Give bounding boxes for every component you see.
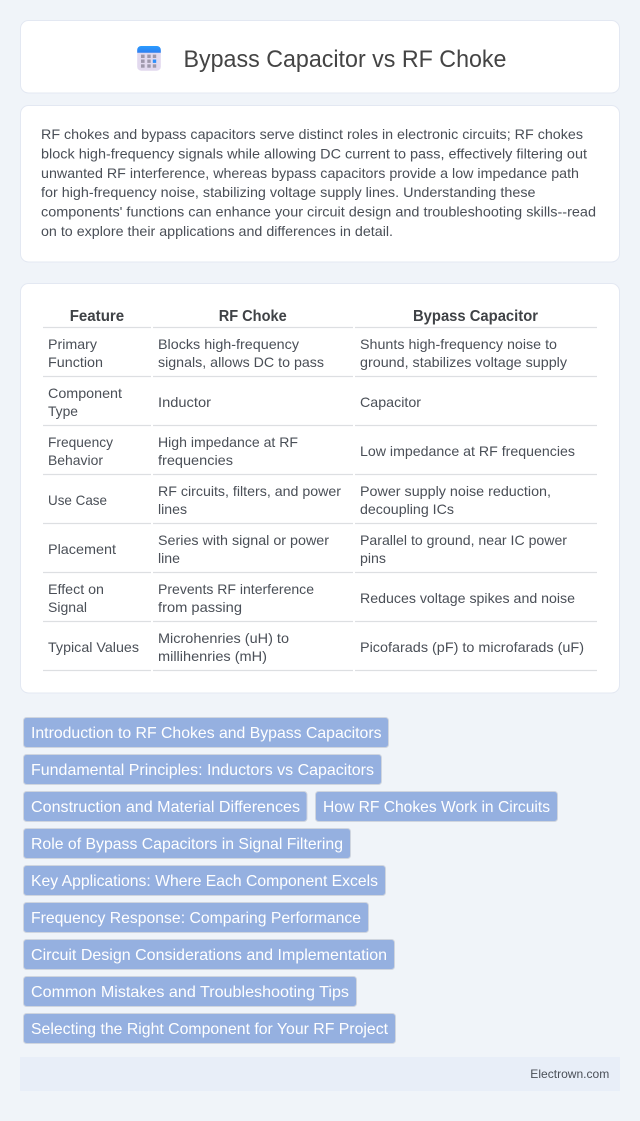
footer: Electrown.com	[530, 1067, 609, 1081]
table header	[70, 308, 538, 325]
tag: construction: Construction and Material Differences	[31, 799, 300, 816]
row: primary function: ground, stabilizes voltage supply	[360, 354, 567, 370]
tag: how RF chokes work: How RF Chokes Work in Circuits	[323, 799, 550, 816]
tag: fundamental principles: Fundamental Principles: Inductors vs Capacitors	[31, 762, 374, 779]
row: placement: pins	[360, 550, 386, 566]
tag: selecting component: Selecting the Right Component for Your RF Project	[31, 1021, 389, 1038]
row: component type: Inductor	[158, 394, 211, 410]
table header: Bypass Capacitor	[413, 308, 538, 325]
row: effect on signal: Prevents RF interference	[158, 581, 314, 597]
row: use case: Use Case	[48, 492, 107, 508]
row: primary function: Blocks high-frequency	[158, 336, 299, 352]
row: typical values: millihenries (mH)	[158, 648, 267, 664]
topic tags	[24, 718, 558, 1044]
title: Bypass Capacitor vs RF Choke	[184, 46, 506, 73]
tag: construction	[24, 792, 307, 822]
intro paragraph	[41, 126, 596, 239]
row: component type: Capacitor	[360, 394, 421, 410]
row: effect on signal: Reduces voltage spikes and noise	[360, 590, 575, 606]
row: placement: Parallel to ground, near IC power	[360, 532, 567, 548]
tag: introduction: Introduction to RF Chokes and Bypass Capacitors	[31, 725, 382, 742]
tag: frequency response	[24, 902, 368, 932]
row: effect on signal: Signal	[48, 599, 87, 615]
intro paragraph: unwanted RF interference, whereas bypass capacitors provide a low impedance path	[41, 165, 579, 181]
tag: frequency response: Frequency Response: Comparing Performance	[31, 910, 361, 927]
row: primary function: Primary	[48, 336, 97, 352]
row: effect on signal: Effect on	[48, 581, 104, 597]
row: effect on signal	[48, 581, 575, 615]
tag: common mistakes: Common Mistakes and Troubleshooting Tips	[31, 984, 349, 1001]
tag: role of bypass capacitors	[24, 828, 350, 858]
tag: role of bypass capacitors: Role of Bypass Capacitors in Signal Filtering	[31, 836, 343, 853]
intro paragraph: for high-frequency noise, stabilizing voltage supply lines. Understanding these	[41, 184, 536, 200]
row: typical values	[48, 630, 584, 664]
tag: introduction	[24, 718, 388, 748]
panel: comparison table	[20, 284, 620, 693]
row: component type	[48, 385, 421, 419]
intro paragraph: block high-frequency signals while allowing DC current to pass, effectively filtering out	[41, 145, 587, 161]
tag: circuit design	[24, 940, 394, 970]
table header: RF Choke	[219, 308, 287, 325]
row: primary function: signals, allows DC to pass	[158, 354, 324, 370]
row: typical values: Typical Values	[48, 639, 139, 655]
row: effect on signal: from passing	[158, 599, 242, 615]
tag: common mistakes	[24, 976, 356, 1006]
row: use case	[48, 483, 551, 517]
panel: title card	[20, 20, 620, 93]
row: primary function: Shunts high-frequency noise to	[360, 336, 557, 352]
tag: circuit design: Circuit Design Considerations and Implementation	[31, 947, 387, 964]
row: frequency behavior: Low impedance at RF frequencies	[360, 443, 575, 459]
row: typical values: Picofarads (pF) to microfarads (uF)	[360, 639, 584, 655]
tag: key applications	[24, 866, 386, 896]
row: frequency behavior: Behavior	[48, 452, 103, 468]
row: use case: lines	[158, 501, 187, 517]
tag: key applications: Key Applications: Where Each Component Excels	[31, 873, 378, 890]
row: placement: line	[158, 550, 180, 566]
intro paragraph: on to explore their applications and differences in detail.	[41, 223, 393, 239]
row: typical values: Microhenries (uH) to	[158, 630, 289, 646]
icon: calculator	[137, 46, 161, 71]
row: use case: decoupling ICs	[360, 501, 454, 517]
row: frequency behavior: Frequency	[48, 434, 113, 450]
row: frequency behavior: High impedance at RF	[158, 434, 298, 450]
row: use case: RF circuits, filters, and power	[158, 483, 341, 499]
panel: introduction	[20, 106, 620, 262]
row: frequency behavior	[48, 434, 575, 468]
footer	[20, 1057, 620, 1091]
intro paragraph: components' functions can enhance your circuit design and troubleshooting skills--read	[41, 204, 596, 220]
row: use case: Power supply noise reduction,	[360, 483, 551, 499]
tag: selecting component	[24, 1014, 396, 1044]
row: frequency behavior: frequencies	[158, 452, 233, 468]
row: placement	[48, 532, 567, 566]
row: component type: Component	[48, 385, 122, 401]
table header: Feature	[70, 308, 124, 325]
intro paragraph: RF chokes and bypass capacitors serve distinct roles in electronic circuits; RF chokes	[41, 126, 583, 142]
tag: fundamental principles	[24, 754, 382, 784]
tag: how RF chokes work	[316, 792, 558, 822]
row: placement: Placement	[48, 541, 116, 557]
row: primary function: Function	[48, 354, 103, 370]
row: component type: Type	[48, 403, 78, 419]
row: placement: Series with signal or power	[158, 532, 329, 548]
row: primary function	[48, 336, 567, 370]
